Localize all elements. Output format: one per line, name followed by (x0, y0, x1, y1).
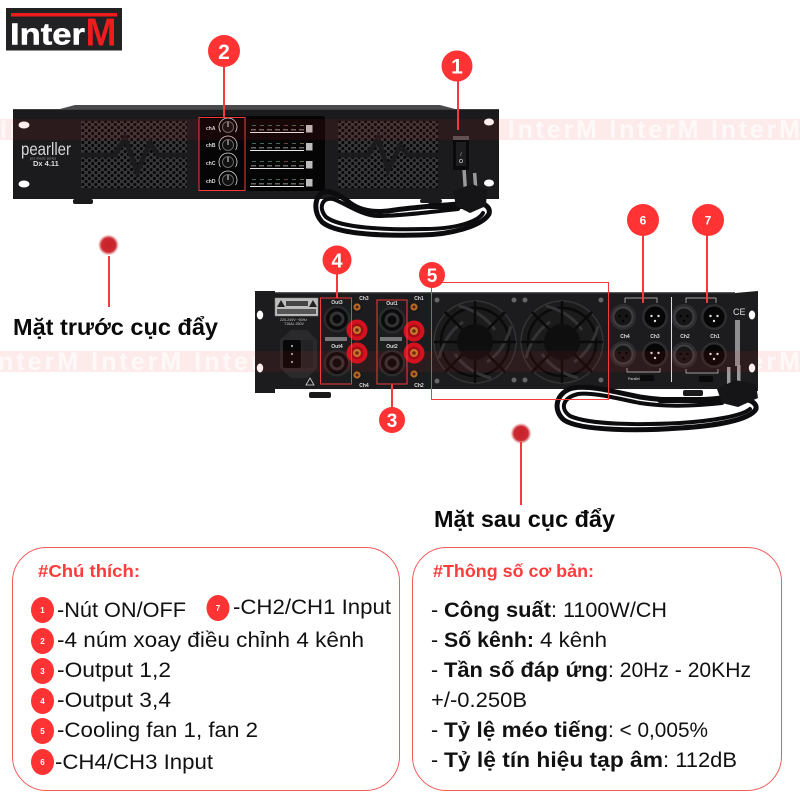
binding posts: Ch3 (359, 296, 369, 302)
control display panel: chC (206, 161, 216, 167)
callout 7 (692, 204, 724, 303)
legend item 6: -CH4/CH3 Input (55, 750, 213, 774)
front view amplifier (13, 105, 499, 204)
logo: Inter M (6, 8, 122, 54)
XLR inputs: Ch4 (620, 334, 630, 340)
callout 1: 1 (451, 56, 463, 78)
left vent (78, 121, 190, 188)
binding posts: Ch2 (414, 383, 424, 389)
speakon outputs: Out2 (386, 344, 398, 350)
logo: Inter M: M (86, 12, 116, 54)
right vent (335, 121, 441, 188)
legend item 3: 3 (40, 667, 45, 676)
control display panel: chA (206, 126, 216, 132)
callout 2 (199, 35, 245, 190)
AC power inlet (280, 330, 317, 385)
legend item 4: 4 (40, 697, 45, 706)
spec: signal to noise: : 112dB (663, 748, 737, 772)
XLR inputs: Ch2 (680, 334, 690, 340)
legend item 7: -CH2/CH1 Input (233, 595, 391, 619)
power plug: front (453, 170, 487, 213)
binding posts: Ch4 (359, 383, 369, 389)
spec: frequency response: Tần số đáp ứng (444, 658, 608, 682)
panel: legend (12, 548, 400, 790)
spec: channels: Số kênh: (444, 628, 534, 652)
legend item 1: 1 (40, 606, 45, 615)
speakon outputs: Out3 (331, 300, 343, 306)
power switch: / (460, 152, 462, 158)
spec: channels (431, 628, 607, 652)
legend item 2: 2 (40, 637, 45, 646)
speakon outputs: Out1 (386, 301, 398, 307)
binding posts (346, 296, 424, 389)
spec: power: : 1100W/CH (551, 598, 667, 622)
brand text: pearller (21, 139, 71, 159)
legend item 5: 5 (40, 727, 45, 736)
speakon outputs: Out4 (331, 344, 343, 350)
watermark band: upper: InterM InterM InterM InterM InterM InterM InterM InterM (0, 116, 800, 144)
spec: signal to noise: - (431, 748, 438, 772)
callout 6 (627, 204, 659, 303)
spec: power: - (431, 598, 438, 622)
legend item 5: -Cooling fan 1, fan 2 (57, 718, 258, 742)
warning label: 220-240V ~50Hz (280, 318, 307, 322)
panel: basic specifications (412, 548, 782, 790)
spec: signal to noise: Tỷ lệ tín hiệu tạp âm (444, 748, 663, 772)
legend item 7: 7 (216, 604, 221, 613)
watermark band: lower: InterM InterM InterM InterM InterM InterM InterM InterM (0, 348, 800, 376)
watermark tint over amplifiers (13, 119, 758, 372)
legend item 4: -Output 3,4 (57, 688, 171, 712)
callout 3: 3 (387, 411, 397, 432)
power plug: rear (717, 365, 758, 407)
legend item 2: -4 núm xoay điều chỉnh 4 kênh (57, 628, 364, 652)
caption: rear side: Mặt sau cục đẩy (434, 506, 615, 532)
warning label (275, 298, 318, 326)
legend item 3: -Output 1,2 (57, 658, 171, 682)
XLR inputs: Ch3 (650, 334, 660, 340)
spec: channels: - (431, 628, 438, 652)
spec: power (431, 598, 667, 622)
brand text: pro music series (30, 156, 56, 160)
legend item 1: -Nút ON/OFF (57, 598, 186, 622)
callout 7: 7 (705, 214, 712, 228)
spec: frequency response: : 20Hz - 20KHz (608, 658, 751, 682)
caption: rear side (434, 423, 615, 532)
caption: front side: Mặt trước cục đẩy (13, 314, 218, 340)
spec: distortion (431, 718, 708, 742)
power cord: rear (557, 387, 756, 430)
specifications heading: #Thông số cơ bản: (433, 561, 594, 581)
callout 3 (377, 300, 407, 433)
spec: distortion: : < 0,005% (608, 718, 708, 742)
callout 5: 5 (427, 266, 438, 287)
warning label: T16AL 250V (284, 322, 304, 326)
spec: frequency response (431, 658, 751, 712)
spec: frequency response: - (431, 658, 438, 682)
callout 4 (320, 246, 352, 384)
control display panel (199, 116, 325, 191)
legend item 6: 6 (40, 758, 45, 767)
callout 1 (442, 50, 472, 130)
speakon outputs (324, 300, 406, 376)
spec: signal to noise (431, 748, 737, 772)
rear view amplifier (255, 291, 758, 398)
certification strip: CE (733, 307, 746, 317)
callout 6: 6 (640, 214, 647, 228)
XLR inputs: Ch1 (710, 334, 720, 340)
XLR inputs: Parallel (628, 377, 640, 381)
logo: Inter M: Inter (10, 16, 85, 52)
brand text (21, 139, 71, 168)
binding posts: Ch1 (414, 296, 424, 302)
callout 5 (419, 262, 608, 400)
XLR inputs (610, 297, 727, 382)
control display panel: chD (206, 179, 216, 185)
control display panel: chB (206, 143, 216, 149)
spec: channels: 4 kênh (540, 628, 607, 652)
brand text: Dx 4.11 (33, 159, 59, 168)
spec: power: Công suất (444, 598, 551, 622)
cooling fans (433, 298, 604, 384)
power cord: front (316, 192, 489, 235)
certification strip (733, 307, 746, 366)
spec: distortion: - (431, 718, 438, 742)
legend heading: #Chú thích: (38, 561, 140, 581)
spec: frequency response: +/-0.250B (431, 688, 527, 712)
spec: distortion: Tỷ lệ méo tiếng (444, 718, 608, 742)
power switch (453, 136, 469, 170)
caption: front side (13, 234, 218, 340)
callout 4: 4 (331, 250, 343, 272)
callout 2: 2 (218, 41, 230, 64)
